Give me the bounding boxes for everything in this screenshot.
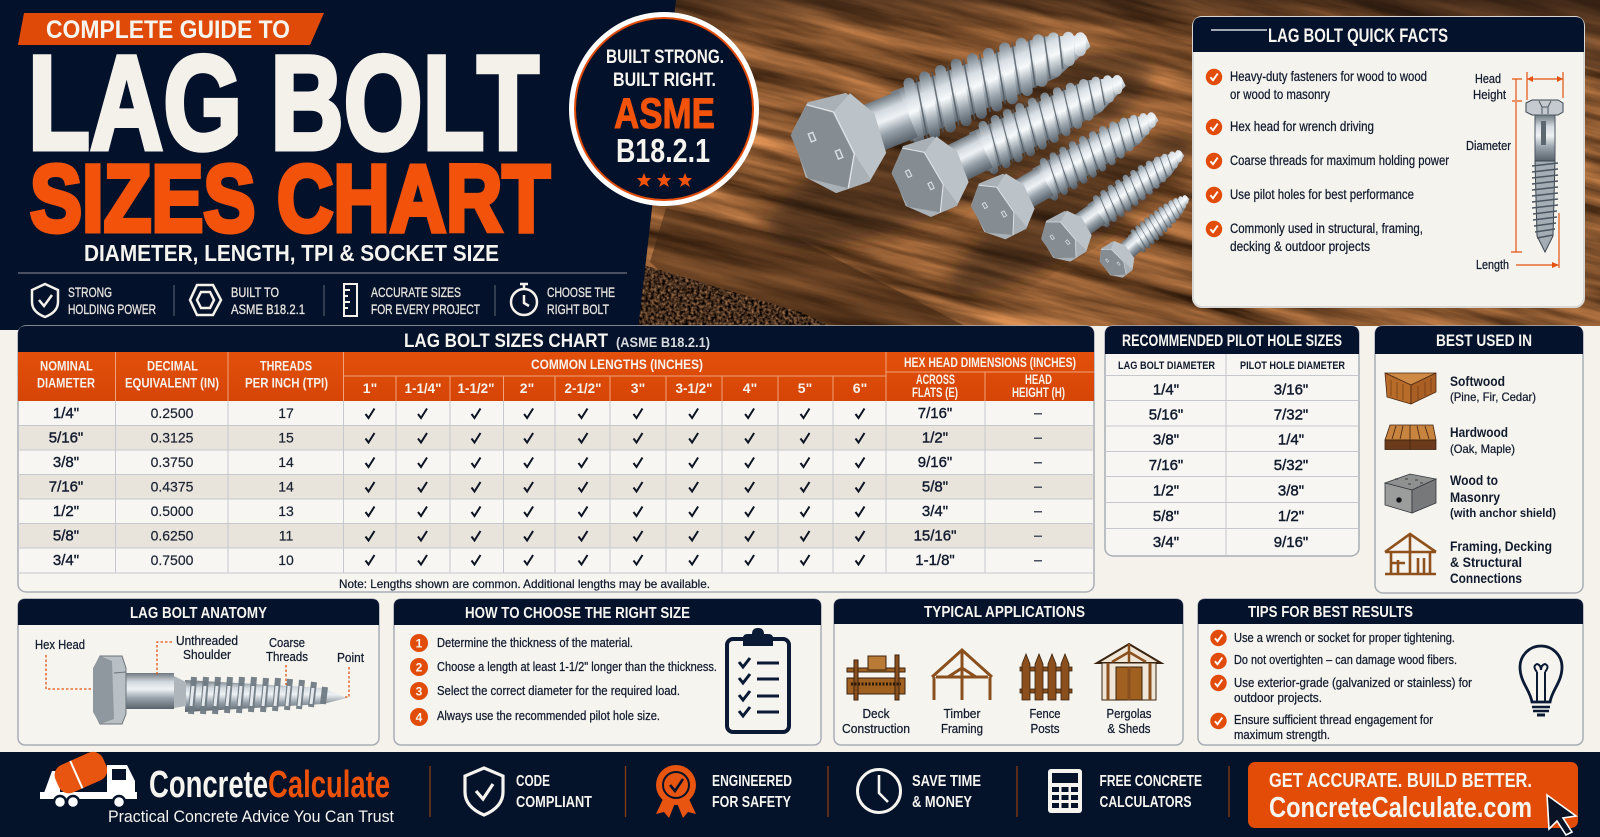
badge: ASME B18.2.1 (569, 12, 759, 206)
table rows: 0.7500 (151, 552, 194, 568)
logo text (108, 764, 394, 826)
table rows: 14 (278, 454, 294, 470)
table rows: 14 (278, 478, 294, 494)
diagram: bolt dimensions: Height (1473, 87, 1506, 102)
numbered steps (410, 634, 717, 726)
application labels: Deck (862, 706, 890, 721)
orange column header: 2" (520, 380, 534, 396)
table rows: 0.6250 (151, 528, 194, 544)
fact list: Commonly used in structural, framing, (1230, 221, 1423, 236)
orange column header: 5" (798, 380, 812, 396)
text: softwood: Softwood (1450, 373, 1505, 389)
text: hardwood: (Oak, Maple) (1450, 442, 1515, 456)
icon: clipboard (727, 628, 789, 732)
labels (35, 633, 364, 665)
tips list: Use exterior-grade (galvanized or stainless) for (1234, 676, 1472, 690)
orange column header: 1-1/4" (404, 380, 442, 396)
text: framing: Framing, Decking (1450, 538, 1552, 554)
numbered steps: Always use the recommended pilot hole size. (437, 709, 660, 723)
text: softwood: (Pine, Fir, Cedar) (1450, 390, 1536, 404)
application labels (842, 706, 1152, 736)
text: code compliant: COMPLIANT (516, 794, 592, 811)
orange column header: 1" (363, 380, 377, 396)
text: wood to masonry (1450, 472, 1556, 520)
text: wood to masonry: Masonry (1450, 489, 1500, 505)
table rows: 7/16" (918, 405, 952, 422)
text: strong holding power: STRONG (68, 284, 112, 300)
text: save time money (912, 773, 981, 811)
icon: timber frame (932, 650, 992, 700)
application labels: Posts (1030, 721, 1060, 736)
icon: hex nut (190, 285, 221, 315)
orange column header: 3-1/2" (676, 380, 712, 396)
bolt 1 (790, 32, 1090, 194)
panel: tips for best results (1198, 599, 1583, 745)
panel: lag bolt quick facts (1193, 17, 1584, 307)
call to action button (1248, 762, 1578, 835)
application labels: Timber (944, 706, 981, 721)
icon: deck (847, 655, 905, 700)
tips list: outdoor projects. (1234, 691, 1322, 705)
diagram: bolt dimensions: Diameter (1466, 138, 1512, 153)
text: code compliant: CODE (516, 773, 550, 790)
pilot hole data: 3/8" (1153, 432, 1179, 448)
orange column header (18, 352, 1094, 401)
table rows: 0.2500 (151, 405, 194, 421)
icon: engineered medal (656, 765, 696, 818)
labels: Unthreaded (176, 633, 238, 648)
table rows: 1-1/8" (915, 552, 955, 569)
text: framing: Connections (1450, 570, 1522, 586)
application labels: & Sheds (1108, 721, 1151, 736)
orange column header: COMMON LENGTHS (INCHES) (531, 356, 703, 372)
icon: house framing (1385, 534, 1436, 574)
table rows: 7/16" (49, 478, 83, 496)
text: choose the right bolt: RIGHT BOLT (547, 301, 609, 317)
title (28, 29, 550, 252)
table rows: 17 (278, 405, 294, 421)
pilot hole data: 7/32" (1274, 406, 1308, 424)
text: built to asme: ASME B18.2.1 (231, 301, 305, 317)
text: framing: & Structural (1450, 554, 1522, 570)
icon: clock (858, 770, 900, 812)
text: accurate sizes: FOR EVERY PROJECT (371, 301, 480, 317)
badge: ASME B18.2.1: ASME (614, 90, 715, 138)
panel: typical applications (834, 599, 1183, 745)
table heading: (ASME B18.2.1) (616, 334, 710, 350)
pilot hole data: 5/32" (1274, 457, 1308, 474)
text: engineered for safety (712, 773, 792, 811)
text: wood to masonry: Wood to (1450, 472, 1498, 488)
diagram: bolt dimensions: Length (1476, 257, 1509, 272)
numbered steps: 1 (416, 636, 423, 650)
icon: calculator (1048, 769, 1082, 813)
icon: hardwood (1385, 425, 1436, 450)
application labels: Construction (842, 721, 910, 736)
text: strong holding power (68, 284, 156, 317)
labels: Coarse (269, 635, 305, 650)
labels: Threads (266, 649, 308, 664)
orange column header: ACROSS (916, 371, 955, 387)
pilot hole data: 3/16" (1274, 382, 1308, 398)
bolt 2 (891, 75, 1126, 217)
tips list: maximum strength. (1234, 728, 1330, 742)
orange column header: 6" (853, 380, 867, 396)
heading: TYPICAL APPLICATIONS (924, 604, 1085, 621)
orange column header: 3" (631, 380, 645, 396)
diagram: bolt dimensions (1466, 71, 1563, 272)
panel: lag bolt anatomy (18, 599, 379, 745)
panel: recommended pilot hole sizes (1105, 326, 1359, 556)
badge: ASME B18.2.1: B18.2.1 (616, 132, 710, 169)
text: accurate sizes: ACCURATE SIZES (371, 284, 461, 300)
text: accurate sizes (371, 284, 480, 317)
table note: Note: Lengths shown are common. Additional lengths may be available. (339, 577, 710, 591)
pilot hole data: PILOT HOLE DIAMETER (1240, 360, 1345, 372)
logo text: Calculate (268, 764, 390, 806)
table rows: 15 (278, 430, 294, 446)
pilot hole data: 1/4" (1153, 382, 1179, 398)
heading: LAG BOLT ANATOMY (130, 605, 268, 622)
table rows: 13 (278, 503, 294, 519)
orange column header: 4" (743, 380, 757, 396)
fact list: Use pilot holes for best performance (1230, 187, 1414, 202)
orange column header: 2-1/2" (564, 380, 602, 396)
orange column header: FLATS (E) (912, 384, 958, 400)
text: built to asme (231, 284, 305, 317)
table rows: 0.5000 (151, 503, 194, 519)
pilot hole data: 5/16" (1149, 406, 1183, 424)
table rows: 0.4375 (151, 478, 194, 494)
table rows: 15/16" (914, 528, 956, 544)
orange column header: HEAD (1025, 371, 1052, 387)
text: wood to masonry: (with anchor shield) (1450, 506, 1556, 520)
icon: shield (32, 284, 58, 317)
table rows (18, 401, 1094, 573)
text: engineered for safety: ENGINEERED (712, 773, 792, 790)
icon: light bulb (1520, 646, 1562, 715)
text: free concrete calculators (1100, 773, 1202, 811)
bolt 5 (1100, 195, 1190, 278)
icon: masonry block (1385, 474, 1436, 513)
fact list: Coarse threads for maximum holding power (1230, 153, 1449, 168)
bolt 4 (1041, 150, 1184, 262)
orange column header: THREADS (260, 358, 312, 374)
title: SIZES CHART (30, 146, 550, 252)
labels: Point (337, 650, 364, 665)
application labels: Framing (941, 721, 983, 736)
table rows: 0.3125 (151, 430, 194, 446)
logo text: Concrete (149, 764, 268, 806)
orange column header: DECIMAL (147, 358, 198, 374)
heading: RECOMMENDED PILOT HOLE SIZES (1122, 331, 1342, 350)
orange column header: EQUIVALENT (IN) (125, 374, 219, 390)
text: hardwood (1450, 424, 1515, 456)
application labels: Pergolas (1106, 706, 1152, 721)
text: framing (1450, 538, 1552, 586)
text: engineered for safety: FOR SAFETY (712, 794, 791, 811)
table rows: 1/4" (53, 405, 79, 422)
table rows: 0.3750 (151, 454, 194, 470)
tips list: Use a wrench or socket for proper tightening. (1234, 631, 1455, 645)
tips list: Do not overtighten – can damage wood fibers. (1234, 653, 1457, 667)
table rows: 5/16" (49, 430, 83, 446)
labels: Shoulder (183, 647, 232, 662)
panel: lag bolt sizes chart table (18, 326, 1094, 592)
heading: BEST USED IN (1436, 331, 1532, 350)
heading: LAG BOLT QUICK FACTS (1268, 26, 1448, 47)
text: choose the right bolt: CHOOSE THE (547, 284, 615, 300)
text: hardwood: Hardwood (1450, 424, 1508, 440)
logo text: Practical Concrete Advice You Can Trust (108, 807, 394, 826)
labels: Hex Head (35, 637, 85, 652)
icon: pergola shed (1097, 644, 1161, 700)
numbered steps: Choose a length at least 1-1/2" longer than the thickness. (437, 660, 717, 674)
panel: how to choose the right size (394, 599, 821, 745)
pilot hole data: 7/16" (1149, 457, 1183, 474)
numbered steps: 3 (416, 684, 423, 698)
icon: fence (1020, 654, 1072, 700)
title: LAG BOLT (28, 29, 539, 178)
numbered steps: Select the correct diameter for the required load. (437, 684, 680, 698)
icon: ruler (344, 284, 357, 316)
call to action button: ConcreteCalculate.com (1269, 792, 1532, 824)
orange column header: 1-1/2" (458, 380, 494, 396)
table rows: 1/2" (53, 503, 79, 520)
icon: code compliant shield (465, 768, 503, 815)
table rows: 3/4" (922, 503, 948, 520)
callout lines (46, 642, 349, 697)
heading: HOW TO CHOOSE THE RIGHT SIZE (465, 605, 690, 622)
bolt 3 (970, 112, 1158, 240)
pilot hole data: LAG BOLT DIAMETER (1118, 360, 1215, 372)
feature row (32, 284, 615, 317)
pilot hole data: 1/4" (1278, 432, 1304, 448)
tips list: Ensure sufficient thread engagement for (1234, 713, 1433, 727)
icon: stopwatch (511, 284, 537, 315)
orange column header: NOMINAL (40, 358, 93, 374)
text: code compliant (516, 773, 592, 811)
numbered steps: Determine the thickness of the material. (437, 636, 633, 650)
fact list: Hex head for wrench driving (1230, 119, 1374, 134)
table rows: 5/8" (922, 478, 948, 496)
diagram: bolt dimensions: Head (1475, 71, 1501, 86)
text: free concrete calculators: CALCULATORS (1100, 794, 1192, 811)
fact list: Heavy-duty fasteners for wood to wood (1230, 69, 1427, 84)
pilot hole data: 9/16" (1274, 534, 1308, 551)
text: choose the right bolt (547, 284, 615, 317)
table rows: 1/2" (922, 430, 948, 446)
orange column header: DIAMETER (37, 374, 95, 390)
orange column header: HEIGHT (H) (1012, 384, 1065, 400)
table rows: 3/4" (53, 552, 79, 569)
table heading: LAG BOLT SIZES CHART (404, 331, 608, 352)
pilot hole data: 1/2" (1278, 508, 1304, 525)
call to action button: GET ACCURATE. BUILD BETTER. (1269, 770, 1532, 792)
table rows: 5/8" (53, 528, 79, 544)
numbered steps: 2 (416, 660, 423, 674)
application labels: Fence (1030, 706, 1060, 721)
orange column header: PER INCH (TPI) (245, 374, 328, 390)
heading: TIPS FOR BEST RESULTS (1248, 604, 1413, 621)
tips list (1210, 630, 1472, 742)
logo: concrete mixer truck (40, 748, 137, 808)
table rows: 9/16" (918, 454, 952, 471)
pilot hole data: 3/8" (1278, 482, 1304, 500)
fact list: or wood to masonry (1230, 87, 1330, 102)
text: free concrete calculators: FREE CONCRETE (1100, 773, 1202, 790)
text: save time money: SAVE TIME (912, 773, 981, 790)
text: save time money: & MONEY (912, 794, 972, 811)
bolt illustration (93, 656, 347, 724)
pilot hole data: 3/4" (1153, 534, 1179, 551)
icon: softwood (1385, 373, 1436, 404)
footer bar (0, 748, 1600, 837)
pilot hole data: 1/2" (1153, 482, 1179, 500)
orange column header: HEX HEAD DIMENSIONS (INCHES) (904, 354, 1076, 370)
pilot hole data: 5/8" (1153, 508, 1179, 525)
orange tag: complete guide to: COMPLETE GUIDE TO (46, 16, 290, 44)
text: strong holding power: HOLDING POWER (68, 301, 156, 317)
fact list (1206, 69, 1449, 254)
hero photo: wood plank with lag bolts (638, 0, 1600, 326)
fact list: decking & outdoor projects (1230, 239, 1370, 254)
navy header panel (0, 0, 676, 330)
subtitle: DIAMETER, LENGTH, TPI & SOCKET SIZE (84, 240, 499, 266)
badge: ASME B18.2.1: BUILT STRONG. (606, 47, 724, 68)
text: built to asme: BUILT TO (231, 284, 279, 300)
icon: cursor (1547, 795, 1576, 835)
pilot hole data (1118, 360, 1345, 551)
badge: ASME B18.2.1: BUILT RIGHT. (613, 70, 716, 91)
table rows: 3/8" (53, 454, 79, 471)
numbered steps: 4 (416, 710, 423, 724)
panel: best used in (1375, 326, 1583, 593)
text: softwood (1450, 373, 1536, 404)
table rows: 10 (278, 552, 294, 568)
table rows: 11 (279, 528, 293, 544)
